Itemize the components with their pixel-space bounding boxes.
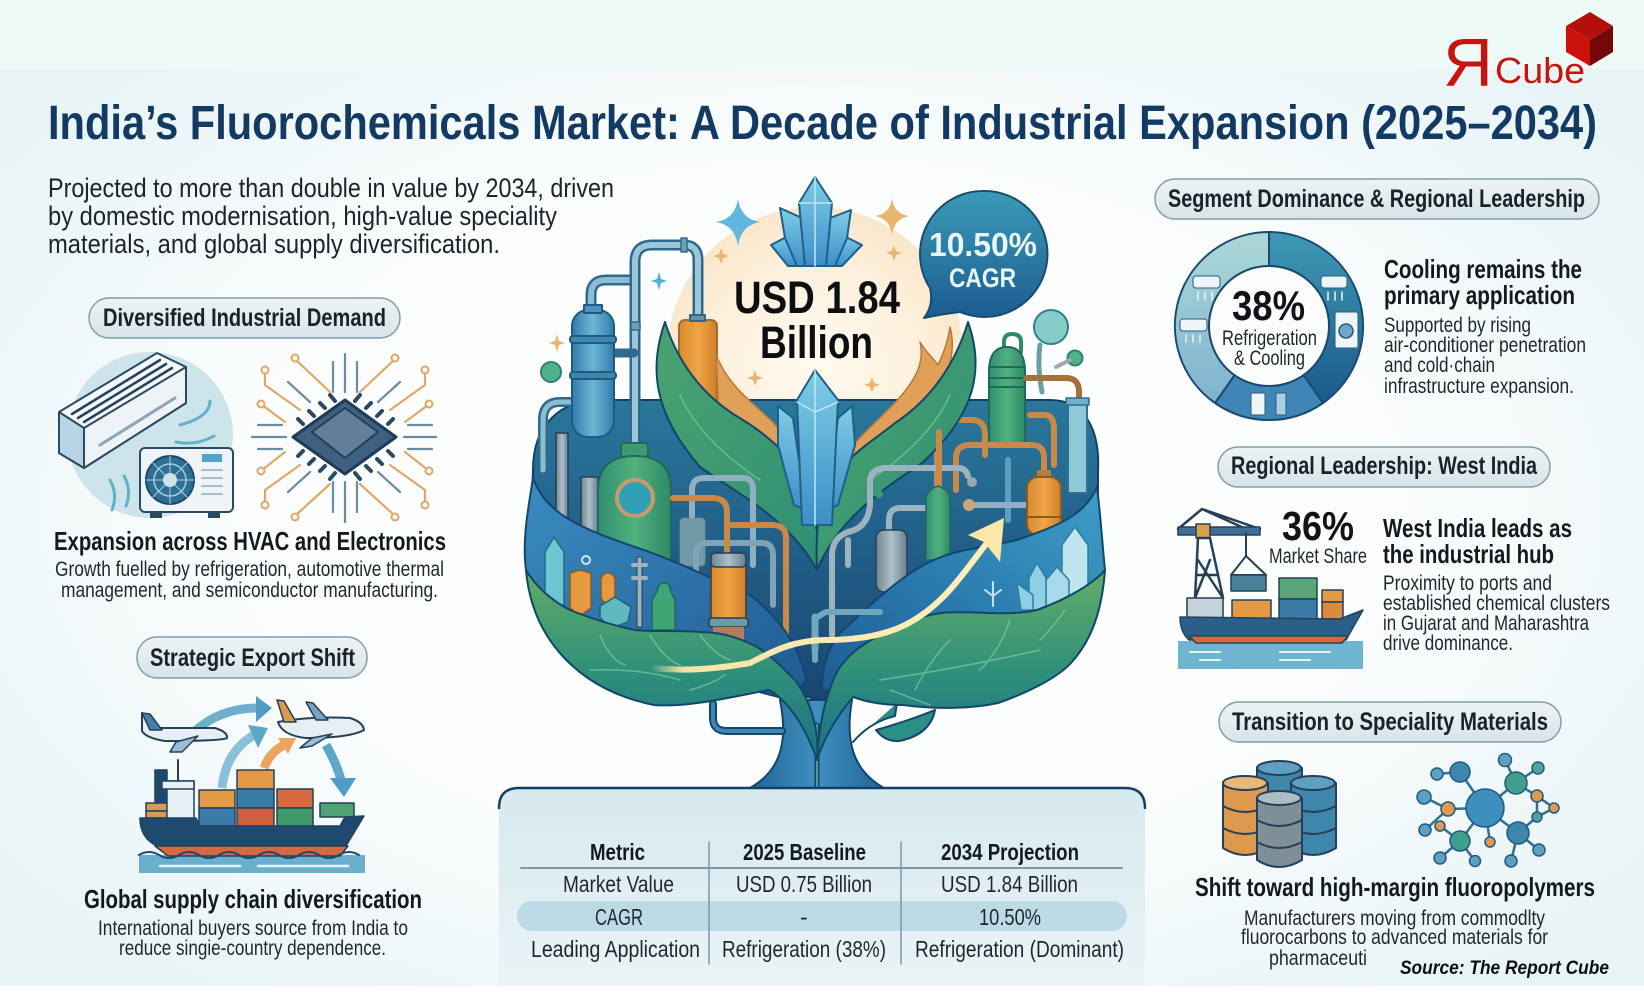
intro text: by domestic modernisation, high-value speciality — [48, 201, 558, 231]
heading pill — [1155, 179, 1599, 219]
description: fluoropolymers: Manufacturers moving from commodlty — [1244, 907, 1545, 930]
donut chart — [1175, 232, 1363, 420]
stat: 36% market share — [1269, 503, 1367, 568]
orange inner leaves — [716, 327, 952, 500]
vessels: right tower — [989, 310, 1089, 493]
description: HVAC: management, and semiconductor manufacturing. — [61, 579, 438, 602]
description: west india: in Gujarat and Maharashtra — [1383, 612, 1589, 635]
heading pill: Transition to Speciality Materials — [1232, 708, 1548, 736]
right blue swoosh — [822, 487, 1105, 690]
subheading: west india: West India leads as — [1383, 513, 1572, 543]
row: CAGR — [595, 904, 1041, 930]
heading pill: Regional Leadership: West India — [1231, 452, 1538, 480]
row: market value: USD 1.84 Billion — [941, 871, 1078, 897]
equipment: left interior — [556, 433, 786, 640]
icon: air conditioner — [59, 352, 233, 518]
description: west india — [1383, 572, 1610, 655]
sparkles — [549, 198, 909, 393]
subheading: HVAC: Expansion across HVAC and Electronics — [54, 526, 446, 556]
stat: 36% market share: Market Share — [1269, 545, 1367, 568]
row: CAGR: - — [800, 904, 808, 930]
icon: top crystal — [771, 177, 862, 266]
intro text: materials, and global supply diversification. — [48, 229, 500, 259]
left blue swoosh — [525, 478, 806, 700]
tall equipment: left pipes and vessels — [543, 238, 698, 470]
description: cooling: and cold·chain — [1384, 354, 1495, 377]
row: leading application: Refrigeration (38%) — [722, 936, 886, 962]
lower right leaf — [817, 570, 1105, 760]
panel: strategic export shift — [84, 637, 422, 960]
subheading: supply chain: Global supply chain diversification — [84, 884, 422, 914]
subheading: west india — [1383, 513, 1572, 569]
header row: 2025 Baseline — [743, 839, 866, 865]
description: cooling: air-conditioner penetration — [1384, 334, 1586, 357]
callout: CAGR speech bubble: CAGR — [949, 263, 1016, 293]
row: leading application: Leading Application — [531, 936, 700, 962]
description: cooling — [1384, 314, 1586, 398]
lower left leaf — [526, 570, 818, 760]
heading pill — [137, 637, 367, 678]
icon: molecule — [1417, 754, 1559, 867]
icon: semiconductor chip — [252, 354, 436, 522]
value: USD 1.84 Billion: USD 1.84 — [734, 272, 900, 323]
header row: Metric — [590, 839, 645, 865]
row: leading application: Refrigeration (Dominant) — [915, 936, 1124, 962]
objects on right swoosh — [985, 527, 1088, 610]
panel: segment dominance — [1155, 179, 1599, 420]
value: USD 1.84 Billion: Billion — [760, 317, 873, 368]
leaf veins — [590, 610, 1065, 705]
value: USD 1.84 Billion — [734, 272, 900, 368]
description: cooling: Supported by rising — [1384, 314, 1531, 337]
subheading: west india: the industrial hub — [1383, 539, 1554, 569]
trunk — [713, 612, 935, 788]
description: supply chain: reduce singie-country dependence. — [119, 937, 386, 960]
subheading: cooling: primary application — [1384, 280, 1575, 310]
intro text — [48, 173, 614, 259]
pipes: upper right orange — [937, 415, 1054, 495]
header row: 2034 Projection — [941, 839, 1079, 865]
central illustration: growth tree — [525, 177, 1105, 788]
table grid — [521, 842, 1122, 964]
logo: RCube: Cube — [1495, 50, 1585, 91]
vessel: green ball — [541, 362, 561, 382]
vessel: blue column — [570, 305, 616, 437]
heading pill — [1219, 702, 1561, 742]
description: supply chain — [98, 917, 408, 960]
objects on left swoosh — [545, 537, 748, 641]
row: market value: Market Value — [563, 871, 674, 897]
icon: port crane and cargo ship — [1178, 509, 1363, 669]
description: cooling: infrastructure expansion. — [1384, 375, 1574, 398]
panel: regional leadership — [1178, 447, 1610, 669]
description: fluoropolymers: fluorocarbons to advanced materials for — [1241, 926, 1548, 949]
subheading: cooling: Cooling remains the — [1384, 254, 1582, 284]
equipment: right interior — [832, 432, 1061, 635]
center crystal — [778, 370, 855, 525]
description: west india: drive dominance. — [1383, 632, 1513, 655]
donut label — [1222, 282, 1317, 370]
panel: metrics table — [499, 788, 1145, 986]
row: CAGR: CAGR — [595, 904, 643, 930]
row: market value: USD 0.75 Billion — [736, 871, 872, 897]
heading pill: Strategic Export Shift — [150, 644, 356, 672]
logo: RCube: Я — [1443, 25, 1493, 101]
row: market value — [563, 871, 1078, 897]
highlighted CAGR row — [517, 901, 1127, 931]
description: supply chain: International buyers source from India to — [98, 917, 408, 940]
subheading: cooling — [1384, 254, 1582, 310]
logo: RCube — [1443, 12, 1613, 101]
icon: arrows — [194, 696, 356, 797]
top strip — [0, 0, 1644, 69]
heading pill — [89, 298, 400, 338]
description: HVAC — [55, 558, 444, 602]
row: leading application — [531, 936, 1124, 962]
description: fluoropolymers — [1241, 907, 1548, 970]
intro text: Projected to more than double in value by 2034, driven — [48, 173, 614, 203]
header row — [590, 839, 1079, 865]
donut label: & Cooling — [1234, 347, 1305, 370]
panel: transition to speciality materials — [1195, 702, 1595, 970]
icon: container ship — [139, 760, 365, 873]
icon: barrels — [1223, 761, 1336, 867]
heading pill — [1218, 447, 1550, 487]
top border — [499, 788, 1145, 808]
panel: diversified industrial demand — [54, 298, 446, 602]
icon: plane left — [142, 713, 227, 752]
glow disc — [667, 207, 963, 503]
description: HVAC: Growth fuelled by refrigeration, automotive thermal — [55, 558, 444, 581]
donut label: Refrigeration — [1222, 327, 1317, 350]
donut label: 38% — [1232, 282, 1305, 329]
vessel: orange column — [679, 315, 717, 430]
heading pill: Diversified Industrial Demand — [103, 304, 386, 332]
callout: CAGR speech bubble — [920, 191, 1047, 318]
dark bowl — [532, 400, 1098, 700]
description: west india: Proximity to ports and — [1383, 572, 1552, 595]
callout: CAGR speech bubble: 10.50% — [929, 226, 1037, 263]
upper leaves — [657, 322, 976, 570]
stat: 36% market share: 36% — [1282, 503, 1354, 549]
source note: Source: The Report Cube — [1400, 958, 1609, 979]
row: CAGR: 10.50% — [979, 904, 1041, 930]
arrow: growth trend — [650, 518, 1004, 670]
description: fluoropolymers: pharmaceuti — [1269, 947, 1367, 970]
icon: plane right — [277, 700, 364, 748]
